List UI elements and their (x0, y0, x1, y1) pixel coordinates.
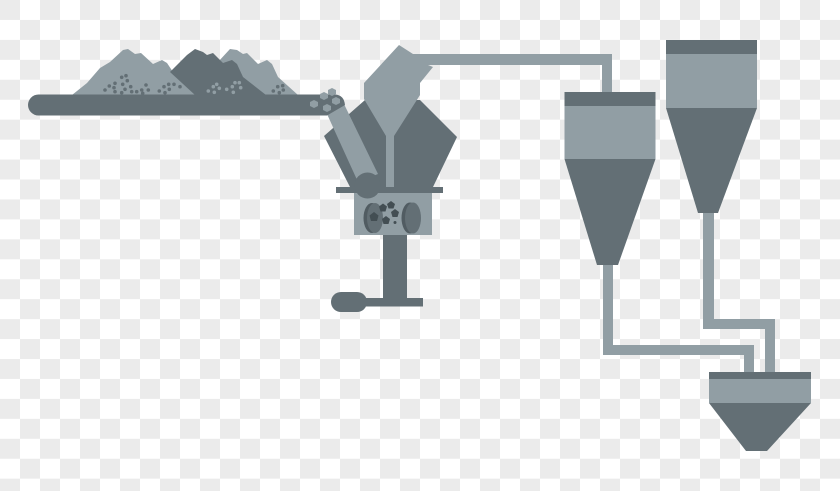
right roller (402, 202, 421, 234)
pipe from cyclone 2 to hopper (703, 213, 775, 372)
crushed ore (370, 201, 399, 224)
mill hopper lobes (324, 100, 457, 187)
pile: right light (218, 49, 298, 95)
inclined chute (327, 104, 378, 182)
ore dots: dark (103, 74, 285, 95)
mill column (383, 235, 407, 299)
crusher rollers and ore (364, 201, 421, 234)
ore piles (72, 49, 298, 95)
mill base with handle (331, 292, 423, 312)
ore chunks on belt (310, 88, 340, 112)
collection hopper (709, 372, 811, 451)
chute pivot drum (354, 172, 380, 198)
conveyor belt (28, 94, 345, 116)
pile: middle dark (170, 49, 266, 95)
crusher housing (354, 190, 432, 235)
ore dots: light (206, 81, 242, 94)
pipe from cyclone 1 to hopper (603, 265, 754, 372)
crusher top flange (336, 187, 443, 193)
left roller (364, 203, 383, 233)
cyclone 1 (564, 92, 656, 265)
feed funnel and pipe to first cyclone (364, 45, 612, 188)
cyclone 2 (666, 40, 757, 213)
pile: left light (72, 49, 197, 95)
